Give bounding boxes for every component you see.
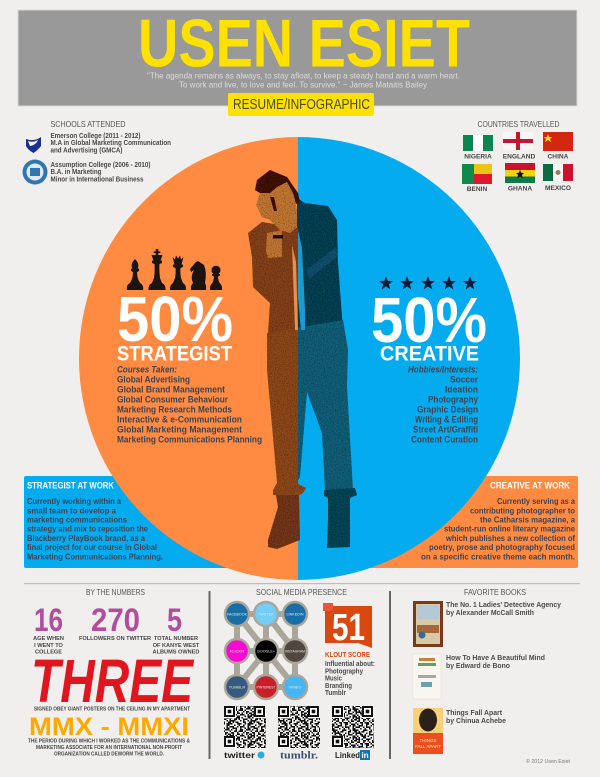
flag: Ghana: GHANA (508, 186, 532, 192)
hobbies list: Writing & Editing (415, 414, 478, 426)
text: creative at work copy: CREATIVE AT WORK (490, 480, 570, 490)
text: creative at work copy: on a specific creative theme each month. (421, 552, 575, 562)
creative label: CREATIVE (380, 342, 479, 366)
section: schools attended (22, 119, 171, 184)
stat: THREE caption: SIGNED OBEY GIANT POSTERS ON THE CEILING IN MY APARTMENT (34, 706, 190, 712)
stat: 5: TOTAL NUMBER (154, 636, 198, 642)
network diagram: FLICKR (230, 648, 244, 654)
creative block (371, 276, 487, 446)
hobbies list: Street Art/Graffiti (413, 424, 478, 436)
stat: 270: 270 (91, 602, 140, 638)
QR code: Tumblr (278, 706, 320, 762)
section: favorite books (413, 587, 570, 765)
hobbies list: Hobbies/Interests: (408, 364, 478, 376)
courses list: Global Consumer Behaviour (117, 394, 228, 406)
network diagram: PINTEREST (256, 684, 276, 690)
text: creative at work copy: Currently serving as a (497, 496, 575, 506)
person: undershirt highlight (292, 245, 298, 330)
hobbies list: Photography (428, 394, 479, 406)
klout text: Branding (325, 683, 352, 690)
text: strategist at work copy: STRATEGIST AT WORK (27, 480, 114, 490)
icon: Emerson College crest (26, 137, 41, 153)
hobbies list: Soccer (450, 374, 478, 386)
courses list: Global Marketing Management (117, 424, 243, 436)
hobbies list (408, 364, 479, 446)
klout text (325, 650, 375, 697)
book: Ladies Detective Agency (413, 600, 562, 647)
network diagram: TWITTER (258, 612, 274, 616)
social heading: SOCIAL MEDIA PRESENCE (256, 587, 347, 597)
network diagram: LINKEDIN (286, 612, 304, 616)
QR code: Twitter: twitter (224, 750, 256, 760)
text: creative at work copy: poetry, prose and photography focused (429, 542, 575, 552)
strategist block (117, 249, 262, 446)
books heading: FAVORITE BOOKS (464, 587, 526, 597)
book: Things Fall Apart (413, 708, 506, 754)
stat: 5: ALBUMS OWNED (153, 650, 199, 656)
subtitle badge: RESUME/INFOGRAPHIC (233, 97, 370, 113)
courses list: Marketing Communications Planning (117, 434, 262, 446)
Assumption College text (50, 162, 150, 184)
stat: MMX caption: ORGANIZATION CALLED DEWORM THE WORLD. (54, 752, 164, 758)
network diagram (225, 602, 307, 699)
klout text: Influential about: (325, 661, 375, 668)
flag: Benin: BENIN (467, 186, 487, 193)
text: creative at work copy: the Catharsis magazine, a (480, 514, 575, 524)
quote (147, 72, 460, 89)
courses list (117, 364, 262, 446)
person: shirt sliver (298, 230, 305, 330)
stat: 16 (33, 602, 64, 656)
courses list: Interactive & e-Communication (117, 414, 242, 426)
text: creative at work copy (421, 480, 575, 562)
stat: 16: COLLEGE (35, 650, 62, 656)
Assumption College text: B.A. in Marketing (50, 169, 102, 176)
stat: 16: AGE WHEN (33, 636, 64, 642)
QR code: LinkedIn (332, 706, 374, 760)
text: strategist at work copy: Blackberry PlayBook brand, as a (27, 533, 145, 543)
flag: England: ENGLAND (503, 154, 536, 160)
quote: To work and live, to love and feel. To survive." ~ James Mataitis Bailey (179, 80, 427, 89)
klout text: Music (325, 676, 342, 682)
panel: creative at work (275, 476, 578, 568)
book: Things Fall Apart: FALL APART (415, 744, 441, 749)
stat: 5: 5 (167, 602, 182, 638)
text: strategist at work copy: small team to develop a (27, 506, 116, 516)
stat: 270: FOLLOWERS ON TWITTER (79, 636, 151, 642)
hobbies list: Content Curation (411, 434, 478, 446)
stat: 270 (79, 602, 151, 642)
network diagram: FACEBOOK (227, 612, 247, 616)
klout text: Photography (325, 668, 363, 676)
network diagram: INSTAGRAM (285, 648, 305, 654)
klout text: Tumblr (325, 690, 346, 697)
stat: 5: OF KANYE WEST (153, 643, 200, 649)
text: creative at work copy: which publishes a new collection of (445, 533, 575, 543)
network diagram: GOOGLE+ (257, 648, 276, 654)
strategist label: STRATEGIST (117, 342, 232, 366)
stat: MMX caption: MARKETING ASSOCIATE FOR AN INTERNATIONAL NON-PROFIT (36, 745, 182, 751)
person: orange half (248, 170, 306, 549)
network diagram: TUMBLR (229, 684, 245, 690)
courses list: Global Brand Management (117, 384, 226, 396)
courses list: Courses Taken: (117, 364, 177, 376)
QR code: Tumblr: tumblr. (280, 750, 319, 762)
book: Things Fall Apart: THINGS (419, 738, 437, 743)
QR code: LinkedIn: in (362, 751, 369, 760)
schools heading: SCHOOLS ATTENDED (50, 119, 126, 129)
courses list: Marketing Research Methods (117, 404, 232, 416)
book: How To Have A Beautiful Mind (413, 653, 545, 699)
creative 50 percent: 50% (371, 284, 487, 356)
icon: five stars (379, 276, 477, 290)
header band (18, 6, 577, 106)
text: strategist at work copy: final project for our course in Global (27, 542, 157, 552)
icon: Assumption College seal (22, 160, 48, 184)
book: How To Have A Beautiful Mind: by Edward de Bono (446, 661, 510, 670)
quote: "The agenda remains as always, to stay afloat, to keep a steady hand and a warm heart. (147, 72, 460, 80)
stat: MMX - MMXI: MMX - MMXI (29, 713, 189, 741)
flag: China: CHINA (548, 154, 569, 160)
courses list: Global Advertising (117, 374, 190, 386)
hobbies list: Ideation (445, 384, 478, 396)
stat: MMX caption: THE PERIOD DURING WHICH I WORKED AS THE COMMUNICATIONS & (28, 738, 190, 744)
hobbies list: Graphic Design (417, 404, 478, 416)
QR code: Twitter (224, 706, 266, 760)
network diagram: VIMEO (289, 684, 301, 690)
text: strategist at work copy (27, 480, 163, 562)
copyright: © 2012 Usen Esiet (526, 758, 570, 765)
klout text: KLOUT SCORE (325, 650, 370, 659)
stat: THREE: THREE (31, 647, 195, 715)
countries heading: COUNTRIES TRAVELLED (478, 119, 560, 129)
text: strategist at work copy: marketing communications (27, 514, 127, 524)
Emerson College text: and Advertising (GMCA) (50, 148, 122, 154)
section: countries travelled (462, 119, 573, 193)
QR code: LinkedIn: Linked (335, 751, 360, 760)
subtitle badge (228, 93, 374, 116)
figure: split-tone person (248, 170, 357, 549)
stat: 16: I WENT TO (34, 643, 64, 649)
book: Ladies Detective Agency: The No. 1 Ladies' Detective Agency (446, 600, 562, 609)
strategist 50 percent: 50% (117, 283, 233, 355)
Emerson College text (50, 133, 171, 154)
text: creative at work copy: contributing photographer to (470, 506, 575, 516)
pie chart: 50/50 circle (79, 137, 520, 580)
Assumption College text: Assumption College (2006 - 2010) (50, 162, 150, 169)
book: Ladies Detective Agency: by Alexander McCall Smith (446, 608, 534, 617)
klout badge: 51 (332, 607, 365, 649)
book: Things Fall Apart: Things Fall Apart (446, 708, 502, 717)
icon: chess pieces (127, 249, 222, 290)
text: strategist at work copy: strategy and mix to reposition the (27, 524, 148, 534)
panel: strategist at work (24, 476, 324, 568)
stat: 5 (153, 602, 200, 656)
section: social media presence (224, 587, 375, 762)
book: How To Have A Beautiful Mind: How To Have A Beautiful Mind (446, 653, 545, 662)
text: strategist at work copy: Marketing Communications Planning. (27, 552, 163, 562)
flag: Nigeria: NIGERIA (464, 154, 492, 160)
text: strategist at work copy: Currently working within a (27, 496, 121, 506)
Emerson College text: Emerson College (2011 - 2012) (50, 133, 140, 140)
section: by the numbers (28, 587, 200, 758)
title: USEN ESIET (138, 6, 470, 82)
Assumption College text: Minor in International Business (50, 176, 144, 184)
text: creative at work copy: student-run online literary magazine (444, 524, 575, 534)
Emerson College text: M.A in Global Marketing Communication (50, 140, 171, 147)
numbers heading: BY THE NUMBERS (86, 587, 145, 597)
stat: MMX caption (28, 738, 190, 758)
person: blue half (296, 198, 357, 548)
flag: Mexico: MEXICO (545, 185, 571, 192)
stat: 16: 16 (34, 602, 63, 638)
book: Things Fall Apart: by Chinua Achebe (446, 716, 506, 725)
